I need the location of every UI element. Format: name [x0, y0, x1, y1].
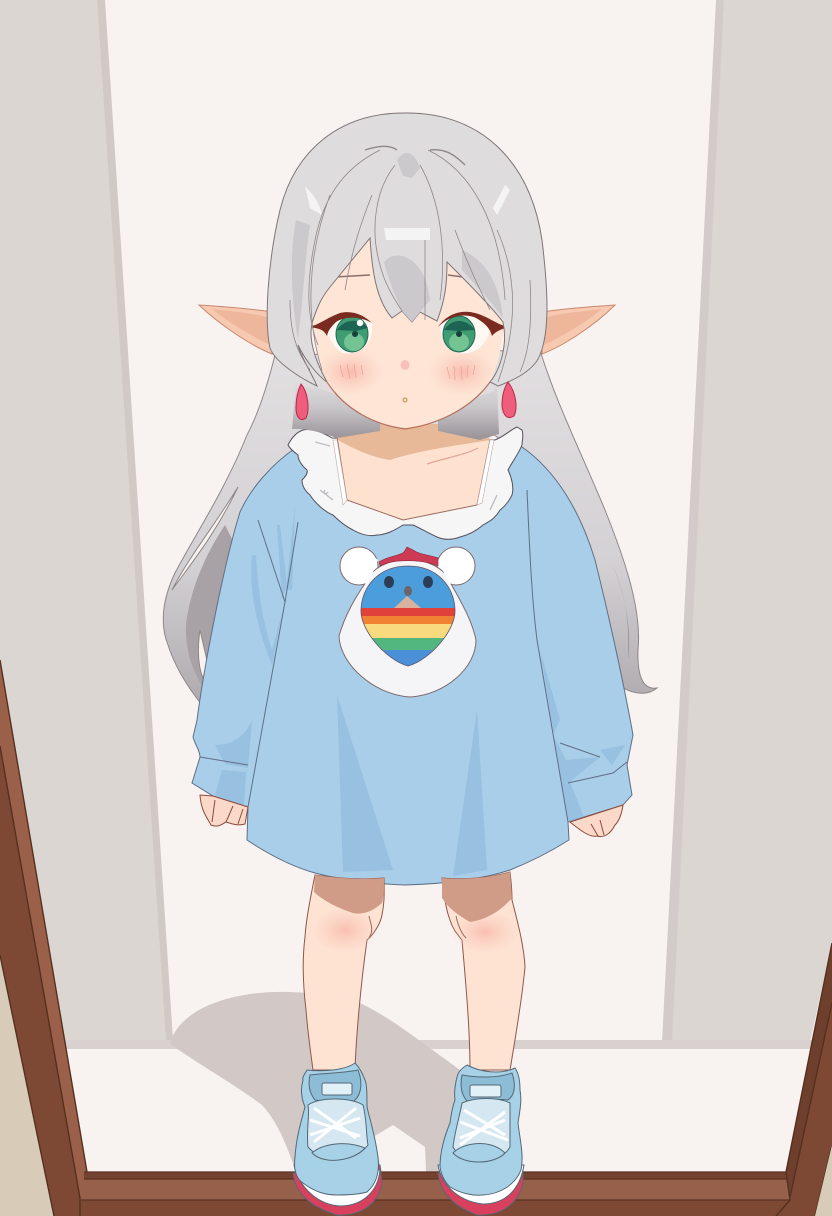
left eye: [307, 312, 372, 353]
sole: [293, 1165, 382, 1215]
left ear: [199, 305, 272, 354]
mouth: [403, 398, 407, 402]
dress fold shading: [215, 505, 625, 876]
blue dress: [192, 447, 633, 885]
neck shadow: [338, 424, 490, 460]
left earring: [296, 384, 308, 420]
front hair: [267, 113, 547, 386]
neck and chest skin: [337, 437, 490, 520]
tongue tag: [470, 1085, 501, 1097]
lace panel: [453, 1098, 510, 1162]
collar straps: [333, 440, 494, 505]
floor shadow: [170, 992, 470, 1172]
upper: [440, 1065, 522, 1195]
face: [310, 240, 505, 429]
door frame: [0, 660, 832, 1216]
left leg: [303, 875, 384, 1070]
right leg: [442, 872, 525, 1070]
eyebrows: [335, 275, 478, 279]
frilled collar: [288, 385, 523, 539]
back hair: [163, 350, 657, 705]
hair shading: [292, 153, 503, 340]
red bow: [379, 547, 438, 566]
nose: [400, 360, 410, 370]
cheek blush: [316, 348, 496, 396]
lace panel: [307, 1099, 368, 1160]
dark hair behind neck: [292, 385, 499, 440]
hands: [200, 795, 623, 837]
hair strands: [290, 150, 531, 382]
right eye: [438, 312, 510, 353]
sleeve and body lines: [200, 490, 627, 822]
inner collar: [309, 1070, 361, 1102]
rainbow heart: [361, 566, 455, 666]
inner collar: [461, 1073, 514, 1102]
upper: [295, 1063, 378, 1195]
right ear: [542, 305, 615, 354]
right earring: [502, 382, 516, 418]
sole: [438, 1165, 523, 1215]
tongue tag: [322, 1083, 352, 1095]
right shoe: [438, 1065, 524, 1215]
hair highlights: [305, 185, 510, 240]
chest badge: bear with rainbow: [339, 547, 476, 697]
left shoe: [293, 1063, 382, 1215]
